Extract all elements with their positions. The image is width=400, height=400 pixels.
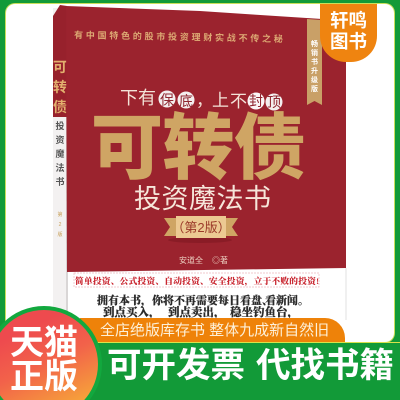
bar text: 可开发票 — [107, 347, 245, 385]
body text: 你将不再需要 — [152, 293, 219, 307]
book spine: 书 — [55, 176, 65, 187]
badge text: 正版 — [10, 358, 78, 396]
book spine: 可 — [53, 59, 67, 75]
bar text right: 代找书籍 — [256, 347, 394, 385]
ribbon text: 书 — [311, 57, 318, 66]
secondary title: 投资魔法书 — [134, 184, 271, 214]
book spine: 法 — [55, 162, 65, 173]
book spine: 第 — [57, 211, 63, 218]
subtitle: 封 — [249, 93, 263, 109]
subtitle: 底 — [179, 93, 193, 109]
edition ribbon: （第2版） — [171, 220, 231, 235]
ribbon text: 级 — [311, 75, 318, 84]
round Tmall badge — [0, 306, 102, 400]
subtitle: 上 — [212, 91, 229, 110]
body text: 到点卖出， — [168, 305, 226, 319]
book spine: 投 — [55, 120, 65, 131]
ribbon text: 畅 — [311, 39, 318, 48]
top tagline: 有中国特色的股市投资理财实战不传之秘 — [74, 29, 286, 44]
ribbon text: 升 — [311, 66, 318, 75]
badge text: 天猫 — [10, 324, 78, 362]
ribbon tab — [307, 19, 322, 105]
badge text: 轩鸣 — [330, 10, 367, 31]
badge text — [330, 10, 367, 52]
body text: 到点买入， — [103, 305, 160, 319]
book spine: 转 — [53, 79, 67, 95]
badge text — [11, 324, 77, 392]
band text: 全店绝版库存书 整体九成新自然旧 — [100, 322, 329, 339]
subtitle: 不 — [230, 92, 247, 111]
body text — [97, 293, 309, 319]
book spine: 魔 — [55, 148, 65, 159]
edition ribbon — [164, 216, 238, 243]
subtitle: 下有 — [120, 88, 156, 108]
green bottom bar — [0, 342, 400, 400]
book spine — [53, 5, 68, 320]
book cover illustration: ◎著 — [212, 255, 228, 265]
badge text: 图书 — [330, 30, 367, 52]
ribbon text — [311, 39, 318, 93]
orange band — [80, 318, 345, 342]
subtitle: ， — [196, 91, 213, 110]
body text: 看新闻。 — [265, 293, 309, 307]
orange badge — [320, 4, 377, 62]
book spine: 债 — [53, 99, 67, 115]
red front cover — [66, 6, 346, 272]
subtitle — [120, 88, 281, 111]
ribbon text: 销 — [311, 48, 318, 57]
book spine: 2 — [59, 222, 62, 228]
body text: 稳坐钓鱼台， — [230, 305, 299, 319]
book spine: 版 — [57, 231, 63, 238]
subtitle circles — [158, 90, 282, 110]
ribbon text: 版 — [311, 84, 318, 93]
book spine: 资 — [55, 135, 65, 145]
main title: 可转债 — [91, 109, 306, 189]
body text: 每日看盘、 — [218, 293, 273, 307]
subtitle: 保 — [160, 92, 174, 108]
cover lower white area — [68, 272, 346, 322]
subtitle: 顶 — [267, 94, 281, 110]
red slogan: 简单投资、公式投资、自动投资、安全投资，立于不败的投资! — [75, 275, 319, 287]
author: 安道全 — [179, 255, 203, 265]
body text: 拥有本书， — [97, 293, 152, 307]
